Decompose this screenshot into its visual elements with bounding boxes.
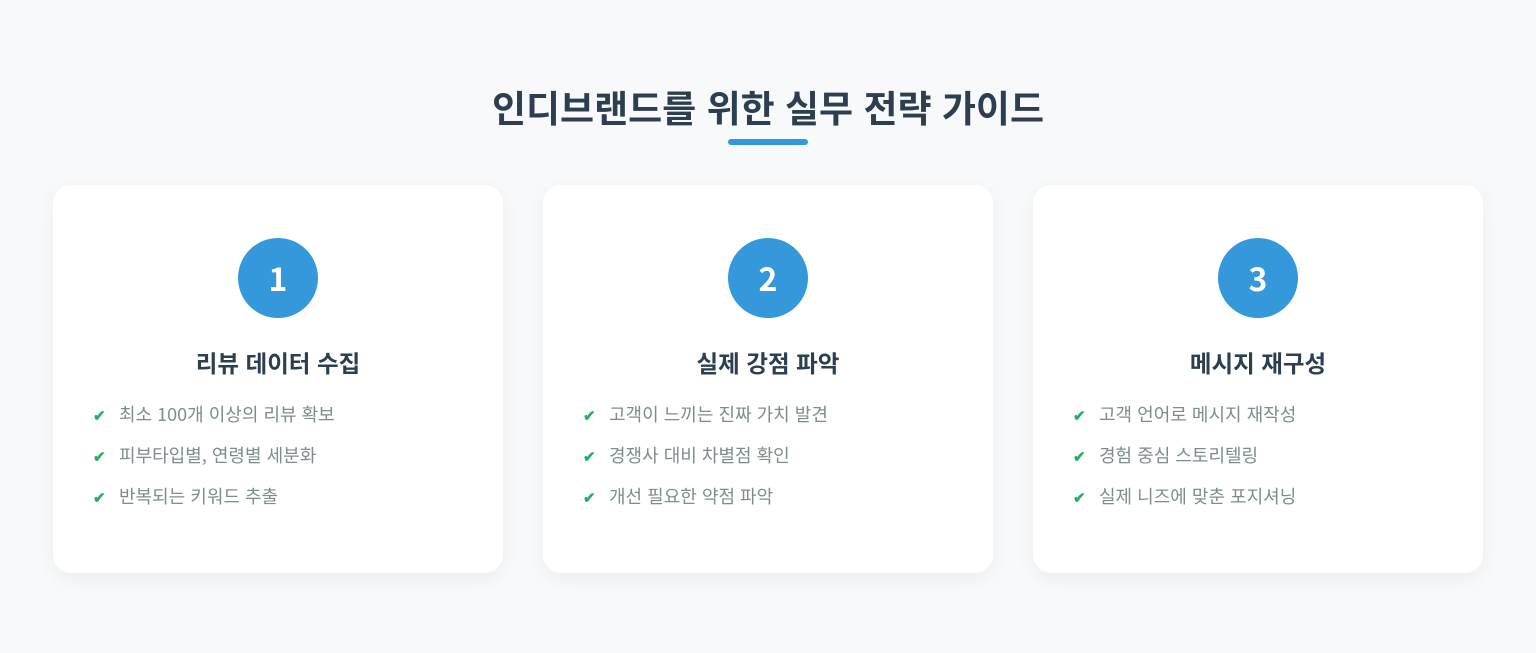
- heading: step 3: 메시지 재구성: [1190, 345, 1326, 379]
- title: 인디브랜드를 위한 실무 전략 가이드: [492, 79, 1044, 133]
- icon: number 3: 3: [1249, 255, 1267, 301]
- panel: step 1: [53, 185, 503, 573]
- checklist: step 3: 고객 언어로 메시지 재작성: [1099, 401, 1296, 427]
- checklist: step 2: 경쟁사 대비 차별점 확인: [609, 442, 790, 468]
- title underline: [728, 139, 808, 145]
- icon: number 1: 1: [269, 255, 287, 301]
- checklist: step 3: [1073, 401, 1296, 509]
- heading: step 2: 실제 강점 파악: [697, 345, 839, 379]
- checklist: step 1: 최소 100개 이상의 리뷰 확보: [119, 401, 335, 427]
- icon: number 2: [728, 238, 808, 318]
- checklist: step 3: 실제 니즈에 맞춘 포지셔닝: [1099, 483, 1296, 509]
- checklist: step 3: ✔: [1073, 446, 1086, 467]
- checklist: step 1: [93, 401, 335, 509]
- checklist: step 1: ✔: [93, 405, 106, 426]
- checklist: step 2: ✔: [583, 405, 596, 426]
- panel: step 2: [543, 185, 993, 573]
- checklist: step 2: [583, 401, 828, 509]
- checklist: step 2: ✔: [583, 446, 596, 467]
- heading: step 1: 리뷰 데이터 수집: [196, 345, 360, 379]
- checklist: step 3: ✔: [1073, 487, 1086, 508]
- checklist: step 3: ✔: [1073, 405, 1086, 426]
- checklist: step 2: 개선 필요한 약점 파악: [609, 483, 773, 509]
- checklist: step 2: 고객이 느끼는 진짜 가치 발견: [609, 401, 828, 427]
- checklist: step 1: ✔: [93, 446, 106, 467]
- checklist: step 1: 피부타입별, 연령별 세분화: [119, 442, 316, 468]
- checklist: step 1: ✔: [93, 487, 106, 508]
- checklist: step 3: 경험 중심 스토리텔링: [1099, 442, 1258, 468]
- icon: number 3: [1218, 238, 1298, 318]
- checklist: step 2: ✔: [583, 487, 596, 508]
- checklist: step 1: 반복되는 키워드 추출: [119, 483, 278, 509]
- icon: number 2: 2: [759, 255, 777, 301]
- panel: step 3: [1033, 185, 1483, 573]
- icon: number 1: [238, 238, 318, 318]
